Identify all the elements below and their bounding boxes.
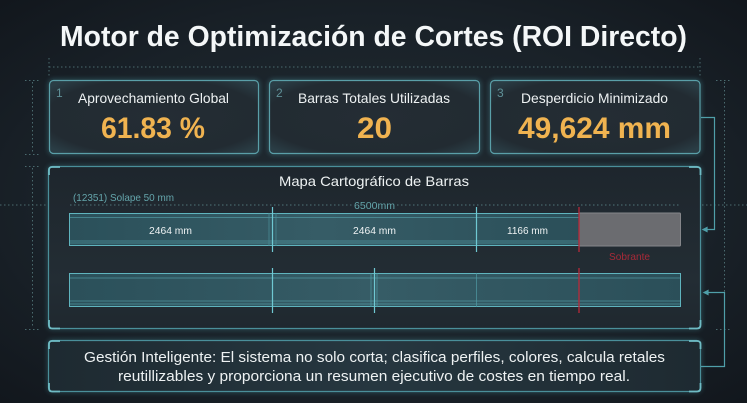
panel: smart management note: Gestión Inteligente: El sistema no solo corta; clasifica perfiles, colores, calcula retales bbox=[84, 349, 665, 366]
title: Motor de Optimización de Cortes (ROI Directo) bbox=[60, 21, 687, 53]
overlap label: (12351) Solape 50 mm bbox=[73, 192, 174, 204]
panel: bar map bbox=[48, 166, 700, 328]
card: Barras Totales Utilizadas: 20 bbox=[357, 112, 392, 145]
segment labels: 1166 mm bbox=[507, 225, 548, 237]
card: Desperdicio Minimizado: 49,624 mm bbox=[518, 112, 671, 145]
arrow: waste card to map bbox=[701, 118, 714, 232]
card: Barras Totales Utilizadas: 2 bbox=[276, 86, 283, 100]
bar 2 bbox=[69, 268, 680, 313]
card: Aprovechamiento Global: 1 bbox=[56, 86, 63, 100]
segment labels bbox=[149, 225, 548, 237]
card: Aprovechamiento Global: Aprovechamiento Global bbox=[78, 90, 229, 106]
segment labels: 2464 mm bbox=[149, 225, 192, 237]
left height dimension lines bbox=[0, 80, 747, 340]
remnant label: Sobrante bbox=[609, 251, 650, 263]
card: Desperdicio Minimizado: Desperdicio Minimizado bbox=[521, 90, 668, 106]
segment labels: 2464 mm bbox=[353, 225, 396, 237]
panel: smart management note: reutillizables y proporciona un resumen ejecutivo de costes en tiempo real. bbox=[118, 368, 630, 385]
bar length dimension: 6500mm bbox=[354, 200, 395, 212]
panel: smart management note bbox=[48, 340, 700, 392]
bar 1 bbox=[69, 207, 680, 252]
card: Barras Totales Utilizadas bbox=[270, 80, 480, 154]
card: Aprovechamiento Global bbox=[50, 80, 258, 154]
map heading: Mapa Cartográfico de Barras bbox=[279, 173, 469, 189]
card: Barras Totales Utilizadas: Barras Totales Utilizadas bbox=[298, 90, 450, 106]
arrow: note to map bbox=[701, 290, 724, 366]
card: Aprovechamiento Global: 61.83 % bbox=[101, 112, 205, 145]
card: Desperdicio Minimizado: 3 bbox=[497, 86, 504, 100]
card: Desperdicio Minimizado bbox=[490, 80, 700, 154]
top width dimension line bbox=[49, 58, 700, 76]
